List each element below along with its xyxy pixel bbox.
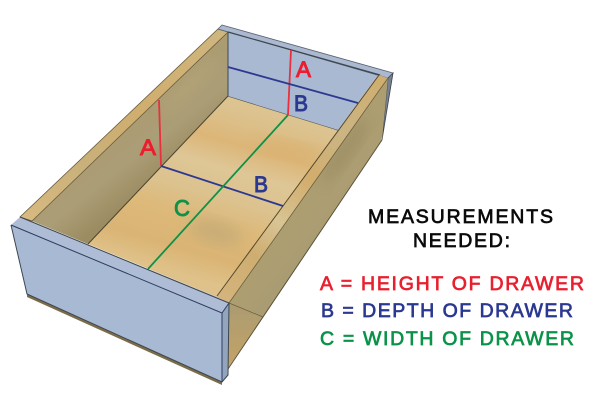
right wall top edge	[217, 75, 388, 303]
right wall outer face	[228, 78, 388, 369]
left wall top edge	[20, 29, 228, 221]
label: C on floor: C	[174, 195, 190, 221]
label: B on back panel: B	[294, 91, 308, 116]
legend: B depth: B = DEPTH OF DRAWER	[321, 300, 573, 322]
heading: measurements needed	[368, 206, 553, 252]
back panel	[218, 25, 393, 130]
label: A on left wall: A	[140, 135, 156, 160]
drawer front panel	[11, 217, 229, 385]
left wall inner face	[32, 32, 228, 244]
measurement line: floor width C	[148, 115, 288, 269]
legend: A height: A = HEIGHT OF DRAWER	[320, 273, 584, 295]
measurement line: back depth B	[228, 67, 358, 103]
heading: measurements needed: MEASUREMENTS	[368, 206, 553, 228]
drawer illustration	[11, 25, 393, 385]
label: B on floor: B	[254, 172, 268, 197]
label: A on back panel: A	[296, 57, 311, 82]
floor panel	[88, 96, 340, 297]
measurement line: back height A	[288, 50, 291, 115]
legend: C width: C = WIDTH OF DRAWER	[320, 328, 574, 350]
measurement line: left wall height A	[159, 100, 161, 166]
back panel end edge	[382, 73, 393, 140]
measurement line: floor depth B	[161, 166, 283, 206]
heading: measurements needed: NEEDED:	[413, 230, 510, 252]
